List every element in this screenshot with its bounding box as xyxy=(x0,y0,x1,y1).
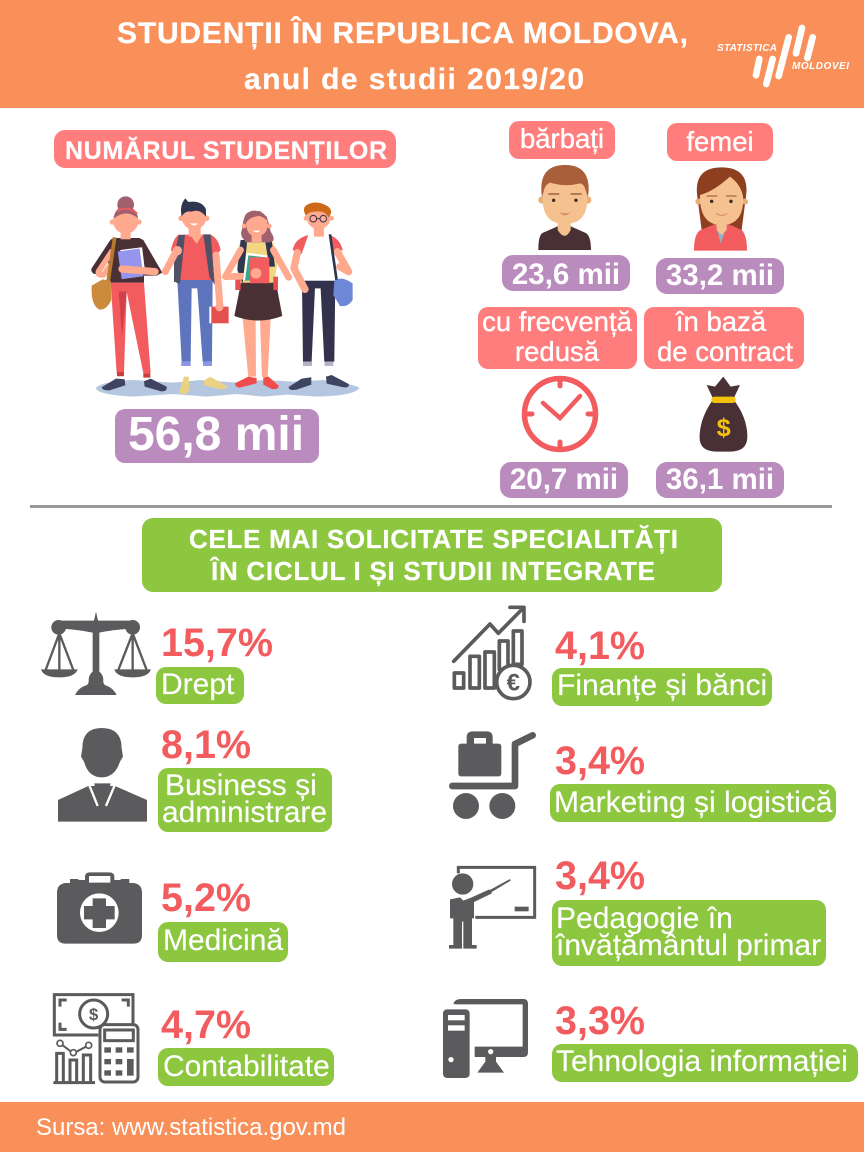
icon: money and calculator xyxy=(53,995,138,1083)
label xyxy=(667,123,773,161)
student 4 xyxy=(289,203,353,390)
label: Finanțe și bănci xyxy=(557,669,767,702)
panel: women xyxy=(656,123,784,294)
label: Drept xyxy=(161,668,235,701)
item: Medicină: 5,2% xyxy=(161,876,251,920)
total value: 56,8 mii xyxy=(128,408,304,461)
panel: men xyxy=(502,121,630,291)
item: Business: 8,1% xyxy=(161,723,251,767)
student 2 xyxy=(165,198,229,394)
label: femei xyxy=(686,126,754,157)
label: administrare xyxy=(162,796,327,829)
panel: contract xyxy=(644,306,804,498)
label: învățământul primar xyxy=(555,929,821,962)
icon: luggage cart xyxy=(452,731,533,819)
heading: most requested specialties: CELE MAI SOLICITATE SPECIALITĂȚI xyxy=(189,524,678,554)
title: anul de studii 2019/20 xyxy=(244,63,584,96)
logo: Statistica Moldovei: STATISTICA xyxy=(717,43,777,54)
item: Business xyxy=(58,723,332,832)
label xyxy=(478,306,637,369)
icon: man avatar xyxy=(538,165,591,250)
item: Drept xyxy=(41,612,273,704)
label: Medicină xyxy=(163,924,283,957)
heading: most requested specialties: ÎN CICLUL I ȘI STUDII INTEGRATE xyxy=(209,556,655,586)
icon: desktop computer xyxy=(443,999,528,1078)
label xyxy=(552,900,826,966)
item: Medicină xyxy=(57,872,288,962)
label: Marketing și logistică xyxy=(554,786,833,819)
label: bărbați xyxy=(520,123,604,154)
item: Pedagogie în învățământul primar: 3,4% xyxy=(555,854,645,898)
item: Marketing și logistică: 3,4% xyxy=(555,739,645,783)
item: Finanțe și bănci: 4,1% xyxy=(555,624,645,668)
panel: part-time xyxy=(478,306,637,498)
label: Business și xyxy=(165,769,317,802)
icon: money bag xyxy=(700,377,747,452)
icon: teacher at board xyxy=(449,867,535,949)
panel: total students xyxy=(54,130,396,463)
student 3 xyxy=(225,211,289,389)
item: Marketing și logistică xyxy=(452,731,836,822)
label: de contract xyxy=(657,336,793,367)
logo: Statistica Moldovei xyxy=(717,28,849,84)
item: Contabilitate: 4,7% xyxy=(161,1003,251,1047)
item: Finanțe și bănci xyxy=(454,607,772,706)
logo: Statistica Moldovei: MOLDOVEI xyxy=(792,61,849,72)
item: Drept: 15,7% xyxy=(161,621,273,665)
footer: source: Sursa: www.statistica.gov.md xyxy=(36,1114,346,1141)
icon: chart with euro coin: € xyxy=(507,670,520,697)
item: Tehnologia informației xyxy=(443,999,858,1082)
label: Contabilitate xyxy=(163,1050,330,1083)
item: Contabilitate xyxy=(53,995,334,1086)
item: Pedagogie în învățământul primar xyxy=(449,854,826,966)
label: Tehnologia informației xyxy=(556,1045,848,1078)
label: redusă xyxy=(515,336,600,367)
icon: woman avatar xyxy=(694,167,748,251)
item: Tehnologia informației: 3,3% xyxy=(555,999,645,1043)
title: STUDENȚII ÎN REPUBLICA MOLDOVA, xyxy=(117,16,688,50)
icon: money and calculator: $ xyxy=(89,1005,99,1024)
header band xyxy=(0,0,864,108)
student 1 xyxy=(92,196,167,391)
icon: scales xyxy=(41,612,151,695)
value: 36,1 mii xyxy=(666,463,774,496)
icon: businessman xyxy=(58,728,147,822)
label: în bază xyxy=(675,306,767,337)
icon: chart with euro coin xyxy=(454,607,530,699)
label xyxy=(509,121,615,159)
value: 33,2 mii xyxy=(666,259,774,292)
icon: clock xyxy=(524,378,596,450)
value: 20,7 mii xyxy=(510,463,618,496)
footer: source xyxy=(0,1102,864,1152)
label xyxy=(158,768,332,832)
icon: money bag: $ xyxy=(717,414,731,442)
label xyxy=(644,306,804,369)
heading: number of students: NUMĂRUL STUDENȚILOR xyxy=(65,136,387,165)
label: cu frecvență xyxy=(482,306,633,337)
heading: number of students xyxy=(54,130,396,168)
label: Pedagogie în xyxy=(556,902,733,935)
icon: medical kit xyxy=(57,872,142,944)
illustration: four students xyxy=(92,196,359,397)
value: 23,6 mii xyxy=(512,258,620,291)
heading: most requested specialties xyxy=(142,518,722,592)
title xyxy=(117,16,688,96)
